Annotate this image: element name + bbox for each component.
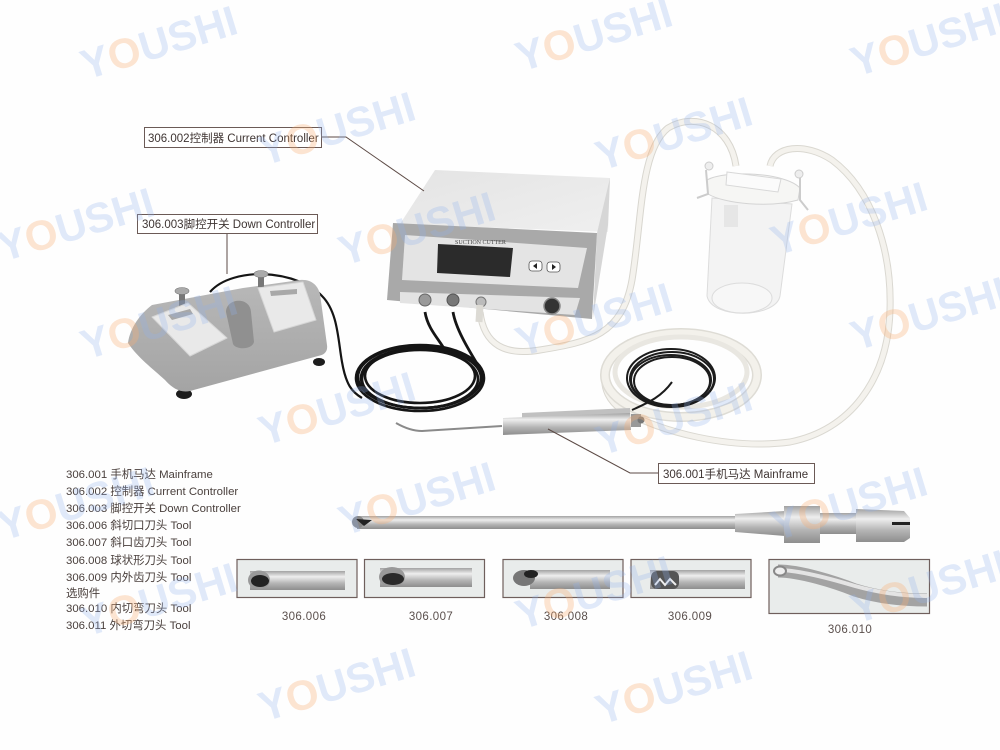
list item 306.002: 306.002 控制器 Current Controller: [66, 484, 238, 498]
watermark layer: YOUSHI: [253, 363, 421, 455]
centre column: [226, 301, 254, 348]
watermark layer: YOUSHI: [253, 83, 421, 175]
watermark layer: YOUSHI: [765, 458, 933, 550]
canister base: [712, 283, 772, 313]
lid clips: [697, 162, 808, 210]
long cutter tool: [352, 506, 910, 543]
list item 306.003: 306.003 脚控开关 Down Controller: [66, 501, 241, 515]
caption 306.006: 306.006: [282, 611, 326, 623]
watermark layer: YOUSHI: [510, 547, 678, 639]
cutter tip: [352, 516, 372, 528]
right black cable coil: [627, 349, 715, 410]
callout: controller: [144, 128, 424, 191]
watermark layer: YOUSHI: [75, 554, 243, 646]
list item 306.011: 306.011 外切弯刀头 Tool: [66, 618, 191, 632]
foot pedal feet: [176, 358, 325, 399]
cutter shaft: [357, 516, 735, 529]
left knob: [175, 288, 189, 306]
controller top face: [400, 170, 610, 232]
parts list: [66, 467, 241, 632]
lid handle: [726, 172, 781, 192]
pedal plates: [168, 289, 297, 320]
detail thumbnails: [237, 560, 930, 614]
callout: mainframe: 306.001手机马达 Mainframe: [663, 467, 808, 481]
suction tube loops: [480, 121, 890, 444]
caption 306.007: 306.007: [409, 611, 453, 623]
thumbnail 306.010: [769, 560, 930, 614]
watermark layer: YOUSHI: [590, 642, 758, 734]
watermark layer: YOUSHI: [75, 277, 243, 369]
thumbnail 306.006: [237, 560, 357, 598]
controller unit: [387, 170, 610, 319]
controller display: [437, 244, 513, 277]
callout: foot controller: 306.003脚控开关 Down Controller: [142, 217, 315, 231]
foot controller: [128, 270, 327, 399]
handpiece tip: [396, 423, 502, 431]
canister lid: [707, 174, 800, 204]
thumbnail 306.008: [503, 560, 623, 598]
thumbnail 306.007: [364, 560, 484, 598]
watermark layer: YOUSHI: [253, 639, 421, 731]
caption 306.009: 306.009: [668, 611, 712, 623]
inner filter: [724, 205, 738, 227]
list item 306.009: 306.009 内外齿刀头 Tool: [66, 570, 191, 584]
thumbnail captions: [282, 611, 872, 636]
list item 306.007: 306.007 斜口齿刀头 Tool: [66, 536, 191, 549]
handpiece: [396, 408, 644, 435]
thumbnail 306.009: [631, 560, 751, 598]
cutter neck: [820, 513, 856, 534]
watermark layer: YOUSHI: [510, 274, 678, 366]
arrow buttons: [529, 261, 560, 272]
connector strip: [400, 292, 580, 315]
optional parts heading: 选购件: [66, 586, 100, 600]
controller side face: [593, 178, 610, 318]
canister jar: [707, 198, 792, 313]
cutter collar: [784, 506, 820, 543]
watermark layer: YOUSHI: [590, 88, 758, 180]
handpiece body: [503, 413, 631, 435]
callout: foot controller: [138, 214, 318, 274]
upper tube: [522, 408, 630, 419]
suction canister: [697, 162, 808, 313]
list item 306.001: 306.001 手机马达 Mainframe: [66, 467, 213, 481]
list item 306.008: 306.008 球状形刀头 Tool: [66, 553, 191, 567]
cutter head: [856, 509, 910, 542]
watermark layer: YOUSHI: [333, 183, 501, 275]
rear connector: [631, 414, 644, 427]
cutter taper: [735, 511, 785, 536]
left pedal: [152, 303, 227, 356]
caption 306.010: 306.010: [828, 624, 872, 636]
right knob: [254, 270, 268, 287]
controller front bezel: [387, 223, 597, 319]
knobs: [419, 294, 560, 314]
caption 306.008: 306.008: [544, 611, 588, 623]
watermark layer: YOUSHI: [590, 373, 758, 465]
list item 306.006: 306.006 斜切口刀头 Tool: [66, 519, 191, 532]
foot pedal base: [128, 280, 327, 391]
panel heading: SUCTION CUTTER: [455, 240, 506, 246]
controller front panel: [402, 235, 587, 288]
watermark layer: YOUSHI: [765, 173, 933, 265]
watermark layer: YOUSHI: [333, 453, 501, 545]
list item 306.010: 306.010 内切弯刀头 Tool: [66, 601, 191, 615]
callout: mainframe: [548, 429, 814, 484]
left black cable coil: [210, 274, 484, 411]
coiled transparent tube: [605, 333, 757, 417]
callout: controller: 306.002控制器 Current Controller: [148, 131, 319, 145]
right pedal: [258, 282, 316, 332]
pale tube from controller: [479, 305, 480, 322]
